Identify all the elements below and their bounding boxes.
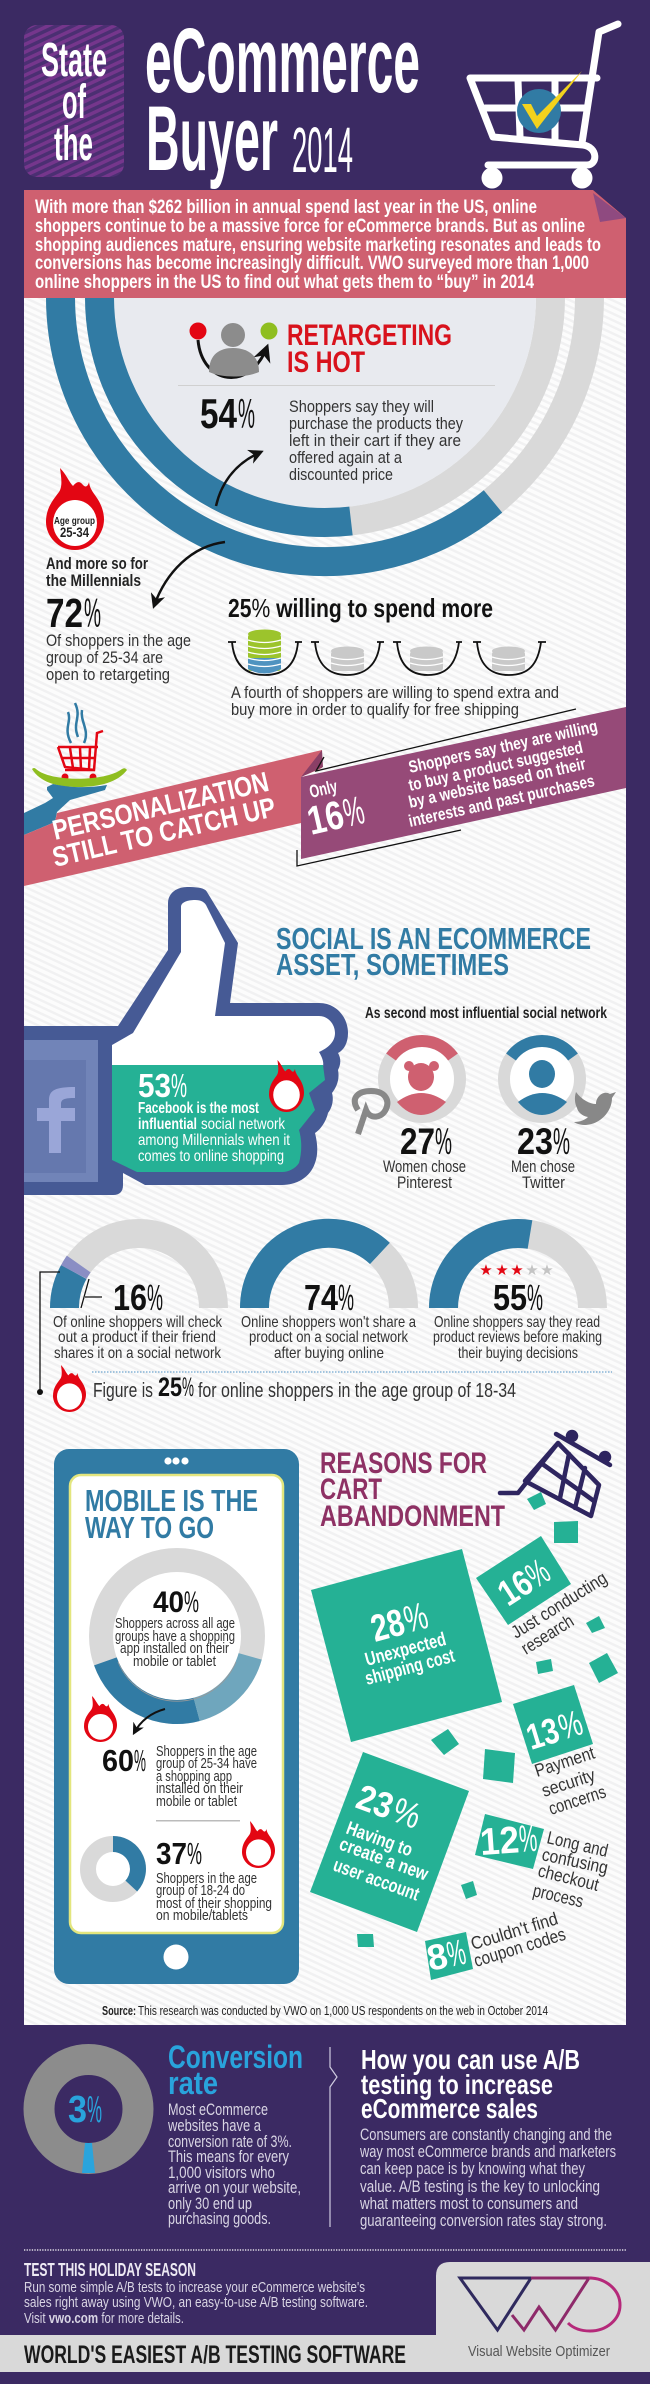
- text: fourth of shoppers: buy more in order to qualify for free shipping: [231, 700, 519, 719]
- icon: twitter bird: [574, 1092, 616, 1125]
- icon: women ring: [384, 1041, 460, 1117]
- title: Buyer: [146, 88, 278, 190]
- stat: men 23%: Twitter: [522, 1173, 565, 1192]
- icon: flame 18-34: [53, 1365, 86, 1412]
- card: 12% long checkout: process: [531, 1880, 585, 1911]
- card: 23% create account: create a new: [336, 1834, 431, 1886]
- chart: conversion donut 3%: [39, 2060, 138, 2173]
- chart: 55% gauge: ★: [540, 1261, 554, 1279]
- stat: 37%: %: [187, 1836, 202, 1871]
- text: millennials: [46, 554, 191, 684]
- stat: women 27%: Women chose: [383, 1157, 466, 1176]
- card: 28% unexpected shipping: Unexpected: [363, 1629, 448, 1671]
- intro band: online shoppers in the US to find out what gets them to “buy” in 2014: [35, 272, 534, 293]
- card: 8% coupon codes: coupon codes: [471, 1924, 568, 1971]
- text: test this holiday season: [24, 2260, 368, 2327]
- text: facebook 53%: %: [171, 1067, 187, 1104]
- badge: State of the: [24, 25, 124, 177]
- text: 55% description: [433, 1314, 602, 1362]
- panel: white content area: [24, 298, 626, 2025]
- heading: conversion rate: Conversion: [168, 2039, 303, 2075]
- chart: 55% gauge: ★: [495, 1261, 509, 1279]
- text: test this holiday season: TEST THIS HOLIDAY SEASON: [24, 2260, 196, 2280]
- card: 23% create account: user account: [330, 1855, 423, 1906]
- stat: men 23%: Men chose: [511, 1157, 575, 1176]
- panel: VWO logo: [436, 2262, 650, 2372]
- source note: Source:: [102, 2003, 136, 2018]
- stat: 60%: 60: [102, 1743, 134, 1778]
- card: 23% create account: [310, 1752, 469, 1932]
- chart: conversion donut 3%: 3: [68, 2089, 87, 2131]
- text: conversion description: arrive on your website,: [168, 2178, 301, 2197]
- text: figure is 25%: %: [182, 1372, 194, 1402]
- stat: women 27%: 27: [400, 1121, 435, 1162]
- banner: only 16%: Shoppers say they are willing: [407, 717, 599, 777]
- icon: retargeting person: [190, 322, 278, 377]
- stat: 37%: Shoppers in the age: [156, 1871, 257, 1887]
- text: facebook 53%: [138, 1067, 290, 1165]
- text: figure is 25%: 25: [158, 1372, 182, 1402]
- banner: personalization: [24, 750, 322, 886]
- heading: mobile: [85, 1483, 258, 1545]
- chart: 74% gauge: 74: [304, 1277, 338, 1318]
- chart: small donut 37%: [88, 1844, 138, 1894]
- decorative squares: [357, 1492, 618, 1947]
- icon: pinterest: [355, 1091, 387, 1134]
- text: millennials: open to retargeting: [46, 665, 170, 684]
- card: 28% unexpected shipping: [311, 1549, 502, 1742]
- card: 8% coupon codes: [423, 1908, 568, 1980]
- text: test this holiday season: Visit vwo.com for more details.: [24, 2310, 184, 2327]
- text: facebook 53%: 53: [138, 1067, 171, 1104]
- card: 13% payment security: %: [553, 1702, 587, 1748]
- heading: conversion rate: [168, 2039, 303, 2101]
- text: A/B testing description: [359, 2125, 616, 2230]
- chart: mobile donut 40%: [101, 1560, 253, 1712]
- arrow: down to millennials: [154, 542, 225, 606]
- banner: only 16%: [297, 707, 626, 866]
- stat: 60%: a shopping app: [156, 1769, 232, 1785]
- text: 74% description: [241, 1314, 416, 1362]
- banner: only 16%: Only: [307, 776, 339, 802]
- text: figure is 25%: [93, 1372, 516, 1402]
- band: tagline: WORLD'S EASIEST A/B TESTING SOFTWARE: [24, 2341, 406, 2369]
- divider chevron: [330, 2047, 337, 2227]
- card: 12% long checkout: 12: [479, 1819, 521, 1864]
- text: retargeting description: Shoppers say they will: [289, 397, 434, 416]
- card: 8% coupon codes: %: [443, 1931, 469, 1975]
- heading: retargeting is hot: [287, 319, 452, 379]
- text: facebook 53%: Facebook is the most: [138, 1100, 259, 1117]
- text: facebook 53%: comes to online shopping: [138, 1148, 284, 1165]
- text: 16% description: out a product if their friend: [58, 1329, 216, 1346]
- badge: State of the: the: [54, 118, 93, 171]
- chart: 55% gauge: ★: [479, 1261, 493, 1279]
- chart: 55% gauge: ★: [525, 1261, 539, 1279]
- banner: personalization: STILL TO CATCH UP: [49, 791, 279, 873]
- text: conversion description: Most eCommerce: [168, 2100, 268, 2119]
- text: millennials: And more so for: [46, 554, 148, 573]
- text: conversion description: websites have a: [167, 2116, 261, 2135]
- icon: facebook thumbs up: [24, 887, 348, 1195]
- arrow: to 60%: [134, 1709, 165, 1733]
- icon: shopping cart with check: [470, 24, 618, 188]
- stat: 37%: most of their shopping: [156, 1896, 272, 1912]
- text: test this holiday season: sales right away using VWO, an easy-to-use A/B testing software.: [24, 2294, 368, 2311]
- card: 8% coupon codes: 8: [423, 1935, 451, 1979]
- card: 13% payment security: 13: [521, 1709, 564, 1758]
- arrow: up to 54%: [216, 452, 261, 506]
- heading: A/B testing: How you can use A/B: [361, 2044, 580, 2075]
- text: retargeting description: offered again at a: [289, 448, 402, 467]
- stat: 60%: mobile or tablet: [156, 1794, 237, 1810]
- stat: women 27%: %: [435, 1121, 452, 1162]
- stat: 54%: 54: [200, 390, 238, 437]
- text: facebook 53%: social network: [201, 1116, 286, 1133]
- title: [145, 10, 420, 190]
- card: 28% unexpected shipping: %: [399, 1595, 433, 1642]
- chart: 16% gauge: 16: [113, 1277, 147, 1318]
- chart: mobile donut 40%: groups have a shopping: [115, 1629, 235, 1645]
- chart: 55% gauge: ★: [510, 1261, 524, 1279]
- card: 23% create account: Having to: [343, 1818, 415, 1861]
- card: 13% payment security: concerns: [546, 1782, 608, 1819]
- stat: women 27%: Pinterest: [397, 1173, 452, 1192]
- icon: flame 18-24: [242, 1821, 275, 1868]
- chart: 55% gauge: 55: [493, 1277, 527, 1318]
- icon: men ring: [504, 1041, 580, 1117]
- card: 12% long checkout: Long and: [545, 1827, 610, 1861]
- icon: flame age group: [46, 468, 104, 550]
- chart: conversion donut 3%: %: [87, 2089, 102, 2131]
- card: 13% payment security: security: [539, 1765, 598, 1801]
- text: 55% description: product reviews before making: [433, 1329, 602, 1346]
- heading: mobile: WAY TO GO: [85, 1510, 214, 1545]
- card: 12% long checkout: confusing: [540, 1844, 610, 1878]
- banner: only 16%: interests and past purchases: [407, 771, 596, 831]
- stat: women 27%: [383, 1121, 466, 1192]
- icon: flame 25-34: [84, 1696, 117, 1742]
- title: 2014: [292, 114, 353, 186]
- text: millennials: %: [84, 590, 101, 636]
- card: 28% unexpected shipping: 28: [366, 1602, 409, 1651]
- text: 55% description: Online shoppers say they read: [434, 1314, 600, 1331]
- text: retargeting description: discounted price: [289, 465, 393, 484]
- chart: 74% gauge: %: [338, 1277, 354, 1318]
- text: A/B testing description: what matters most to consumers and: [359, 2194, 578, 2213]
- text: A/B testing description: can keep pace is by knowing what they: [360, 2159, 585, 2178]
- heading: retargeting is hot: RETARGETING: [287, 319, 452, 352]
- stat: 37%: 37: [156, 1836, 187, 1871]
- text: millennials: the Millennials: [46, 571, 141, 590]
- text: fourth of shoppers: A fourth of shoppers are willing to spend extra and: [231, 683, 559, 702]
- text: 74% description: product on a social network: [249, 1329, 409, 1346]
- chart: 74% gauge: [254, 1233, 404, 1318]
- text: figure is 25%: Figure is: [93, 1380, 153, 1402]
- chart: mobile donut 40%: %: [184, 1586, 199, 1619]
- card: 16% just conducting research: [476, 1536, 611, 1658]
- chart: 16% gauge: %: [147, 1277, 163, 1318]
- stat: 60%: installed on their: [156, 1781, 243, 1797]
- card: 8% coupon codes: Couldn't find: [468, 1908, 560, 1954]
- card: 16% just conducting research: %: [518, 1550, 557, 1596]
- badge: State of the: State: [41, 34, 107, 87]
- stat: men 23%: %: [553, 1121, 570, 1162]
- panel: VWO logo: Visual Website Optimizer: [468, 2343, 610, 2360]
- heading: reasons for cart abandonment: [320, 1447, 505, 1533]
- panel: phone mobile: [54, 1449, 299, 1984]
- text: retargeting description: purchase the products they: [289, 414, 463, 433]
- card: 16% just conducting research: research: [518, 1611, 577, 1658]
- stat: 60%: %: [134, 1743, 146, 1778]
- text: millennials: Of shoppers in the age: [46, 631, 191, 650]
- text: conversion description: [167, 2100, 301, 2228]
- card: 16% just conducting research: 16: [490, 1561, 540, 1614]
- text: figure is 25%: for online shoppers in the age group of 18-34: [198, 1380, 516, 1402]
- text: 74% description: Online shoppers won't share a: [241, 1314, 416, 1331]
- heading: 25% willing to spend more: 25% willing to spend more: [228, 593, 493, 623]
- heading: A/B testing: testing to increase: [361, 2069, 553, 2100]
- icon: flame age group: Age group: [54, 516, 95, 527]
- stat: men 23%: 23: [517, 1121, 553, 1162]
- card: 12% long checkout: [475, 1814, 610, 1911]
- heading: reasons for cart abandonment: ABANDONMENT: [320, 1500, 505, 1533]
- banner: only 16%: to buy a product suggested: [407, 738, 585, 795]
- icon: tipped cart: [500, 1432, 610, 1516]
- chart: mobile donut 40%: app installed on their: [120, 1641, 229, 1657]
- band: tagline: [0, 2335, 440, 2372]
- banner: only 16%: %: [339, 788, 369, 836]
- icon: flame age group: 25-34: [60, 524, 89, 540]
- card: 13% payment security: [513, 1685, 608, 1819]
- text: millennials: group of 25-34 are: [46, 648, 163, 667]
- heading: conversion rate: rate: [168, 2065, 218, 2101]
- text: conversion description: only 30 end up: [168, 2194, 252, 2213]
- stat: 37%: group of 18-24 do: [156, 1883, 245, 1899]
- card: 13% payment security: Payment: [532, 1743, 597, 1781]
- chart: 55% gauge: [444, 1234, 592, 1318]
- chart: retargeting rings: [46, 298, 604, 576]
- text: conversion description: conversion rate of 3%.: [168, 2132, 292, 2151]
- text: retargeting description: [289, 397, 463, 484]
- text: test this holiday season: Run some simple A/B tests to increase your eCommerce website's: [24, 2279, 365, 2296]
- badge: State of the: of: [62, 76, 87, 129]
- card: 12% long checkout: checkout: [536, 1860, 601, 1895]
- banner: personalization: PERSONALIZATION: [49, 766, 272, 846]
- intro band: [24, 190, 626, 298]
- heading: A/B testing: eCommerce sales: [361, 2093, 538, 2124]
- stat: 60%: group of 25-34 have: [156, 1756, 257, 1772]
- stat: 60%: Shoppers in the age: [156, 1744, 257, 1760]
- text: 55% description: their buying decisions: [458, 1345, 578, 1362]
- heading: retargeting is hot: IS HOT: [287, 346, 365, 379]
- chart: mobile donut 40%: 40: [153, 1586, 184, 1619]
- text: fourth of shoppers: [231, 683, 559, 719]
- text: conversion description: This means for every: [168, 2147, 289, 2166]
- icon: bowls and coins: [228, 630, 546, 675]
- text: facebook 53%: among Millennials when it: [138, 1132, 290, 1149]
- stat: 37%: on mobile/tablets: [156, 1908, 248, 1924]
- banner: only 16%: 16: [303, 793, 348, 844]
- heading: A/B testing: [361, 2044, 580, 2124]
- text: %: [238, 390, 255, 437]
- heading: mobile: MOBILE IS THE: [85, 1483, 258, 1518]
- heading: social: ASSET, SOMETIMES: [276, 947, 509, 982]
- intro band: With more than $262 billion in annual spend last year in the US, online: [35, 197, 537, 218]
- heading: social: [276, 921, 591, 982]
- heading: reasons for cart abandonment: CART: [320, 1473, 382, 1506]
- card: 12% long checkout: %: [518, 1818, 539, 1861]
- text: retargeting description: left in their cart if they are: [289, 431, 461, 450]
- text: facebook 53%: influential: [138, 1116, 197, 1133]
- text: 16% description: Of online shoppers will check: [53, 1314, 223, 1331]
- banner: only 16%: by a website based on their: [407, 754, 588, 812]
- stat: 60%: [102, 1743, 257, 1810]
- stat: 37%: [156, 1836, 272, 1924]
- chart: 16% gauge: [37, 1234, 214, 1395]
- icon: hand serving cart: [24, 703, 127, 835]
- chart: mobile donut 40%: mobile or tablet: [133, 1654, 216, 1670]
- chart: mobile donut 40%: Shoppers across all age: [115, 1616, 235, 1632]
- text: millennials: 72: [46, 590, 83, 636]
- text: 74% description: after buying online: [274, 1345, 384, 1362]
- chart: 55% gauge: %: [527, 1277, 543, 1318]
- heading: reasons for cart abandonment: REASONS FOR: [320, 1447, 487, 1480]
- text: 16% description: [53, 1314, 223, 1362]
- stat: men 23%: [511, 1121, 575, 1192]
- text: 16% description: shares it on a social network: [54, 1345, 222, 1362]
- text: conversion description: 1,000 visitors who: [168, 2163, 275, 2182]
- card: 23% create account: 23: [351, 1776, 399, 1827]
- card: 28% unexpected shipping: shipping cost: [363, 1646, 458, 1690]
- text: conversion description: purchasing goods.: [168, 2209, 271, 2228]
- card: 16% just conducting research: Just conducting: [508, 1568, 611, 1642]
- card: 23% create account: %: [387, 1789, 427, 1837]
